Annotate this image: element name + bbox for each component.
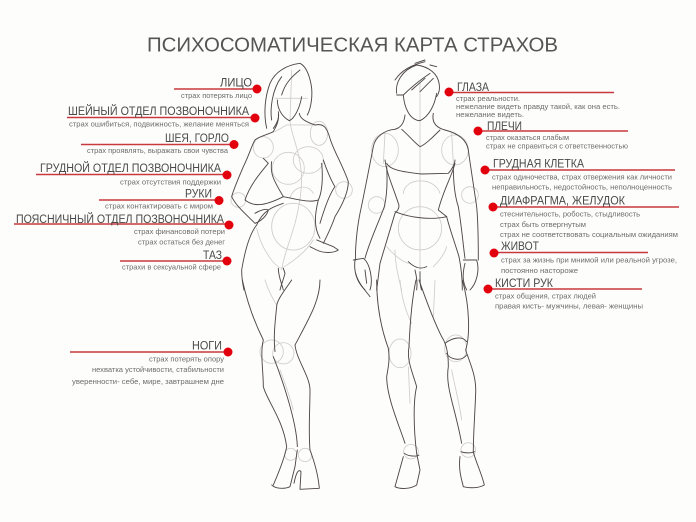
- callout: руки: РУКИ: [185, 188, 212, 200]
- callout: руки: [99, 188, 224, 210]
- callout: ноги: страх потерять опору: [149, 354, 224, 364]
- callout: живот: постоянно настороже: [501, 266, 578, 275]
- callout: поясничный отдел позвоночника: ПОЯСНИЧНЫЙ ОТДЕЛ ПОЗВОНОЧНИКА: [16, 213, 224, 226]
- callout: руки: страх контактировать с миром: [105, 202, 213, 210]
- callout: поясничный отдел позвоночника: страх остаться без денег: [138, 238, 225, 246]
- callout: диафрагма, желудок: страх быть отвергнутым: [500, 220, 586, 229]
- callout: таз: [120, 250, 232, 272]
- male legs: [356, 273, 484, 488]
- callout: ноги: НОГИ: [192, 340, 222, 352]
- callout: плечи: ПЛЕЧИ: [487, 121, 522, 133]
- callout: ноги: уверенности- себе, мире, завтрашнем дне: [72, 377, 224, 386]
- callout: поясничный отдел позвоночника: [14, 213, 234, 246]
- female upper body: [231, 63, 352, 290]
- callout: грудная клетка: неправильность, недостойность, неполноценность: [492, 182, 672, 192]
- callout: лицо: ЛИЦО: [220, 78, 252, 90]
- callout: лицо: страх потерять лицо: [181, 91, 252, 100]
- callout: кисти рук: правая кисть- мужчины, левая- женщины: [495, 302, 643, 310]
- callout: живот: ЖИВОТ: [501, 241, 539, 253]
- callout: шея, горло: страх проявлять, выражать свои чувства: [87, 146, 229, 155]
- callout: ноги: [70, 340, 232, 386]
- callout: плечи: страх оказаться слабым: [486, 133, 569, 142]
- callout: грудная клетка: [480, 158, 675, 192]
- callout: шея, горло: ШЕЯ, ГОРЛО: [165, 133, 229, 145]
- callout: живот: страх за жизнь при мнимой или реальной угрозе,: [501, 256, 677, 264]
- callout: шейный отдел позвоночника: [67, 105, 260, 128]
- callout: таз: страхи в сексуальной сфере: [122, 262, 221, 272]
- callout: глаза: нежелание видеть.: [456, 110, 524, 119]
- callout: кисти рук: КИСТИ РУК: [495, 278, 553, 290]
- female legs: [242, 280, 320, 489]
- figure: female body sketch: [231, 63, 352, 489]
- callout: плечи: [474, 121, 628, 150]
- title: ПСИХОСОМАТИЧЕСКАЯ КАРТА СТРАХОВ: [147, 34, 558, 56]
- callout: плечи: страх не справиться с ответственностью: [486, 142, 628, 150]
- callout: лицо: [174, 78, 262, 100]
- callout: кисти рук: [484, 278, 643, 310]
- callout: шея, горло: [81, 133, 238, 155]
- callout: таз: ТАЗ: [203, 250, 222, 262]
- callout: глаза: страх реальности.: [456, 94, 520, 103]
- callout: живот: [490, 241, 677, 275]
- callout: грудная клетка: страх одиночества, страх отвержения как личности: [492, 172, 672, 182]
- callout: кисти рук: страх общения, страх людей: [495, 292, 596, 300]
- callout: грудная клетка: ГРУДНАЯ КЛЕТКА: [493, 158, 584, 170]
- male upper body: [353, 60, 478, 290]
- callout: поясничный отдел позвоночника: страх финансовой потери: [134, 227, 225, 236]
- callout: шейный отдел позвоночника: ШЕЙНЫЙ ОТДЕЛ ПОЗВОНОЧНИКА: [68, 105, 249, 118]
- callout: шейный отдел позвоночника: страх ошибиться, подвижность, желание меняться: [69, 120, 249, 128]
- callout: диафрагма, желудок: [488, 196, 679, 239]
- callout: глаза: нежелание видеть правду такой, как она есть.: [456, 102, 620, 111]
- callout: глаза: [444, 82, 620, 119]
- callout: грудной отдел позвоночника: страх отсутствия поддержки: [120, 178, 221, 186]
- callout: диафрагма, желудок: страх не соответствовать социальным ожиданиям: [500, 230, 678, 239]
- callout: ноги: нехватка устойчивости, стабильности: [92, 365, 224, 374]
- callout: глаза: ГЛАЗА: [457, 82, 489, 94]
- callout: диафрагма, желудок: ДИАФРАГМА, ЖЕЛУДОК: [500, 196, 625, 208]
- callout: грудной отдел позвоночника: [36, 162, 232, 186]
- figure: male body sketch: [353, 60, 484, 488]
- callout: диафрагма, желудок: стеснительность, робость, стыдливость: [500, 210, 640, 218]
- callout: грудной отдел позвоночника: ГРУДНОЙ ОТДЕЛ ПОЗВОНОЧНИКА: [40, 162, 221, 175]
